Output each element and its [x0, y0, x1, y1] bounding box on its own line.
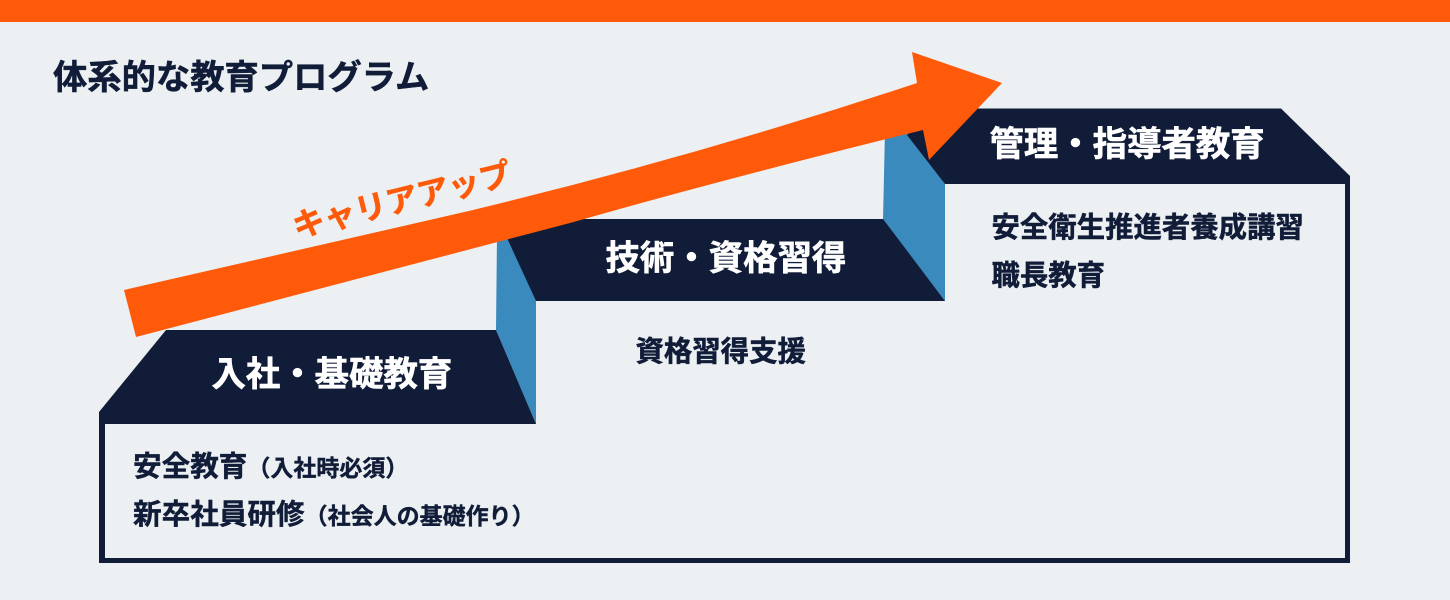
panel: step 3 management education [883, 108, 1350, 301]
text block: step 3 items: 職長教育 [992, 260, 1105, 292]
heading: step 2: 技術・資格習得 [606, 240, 846, 278]
arrow: career up [124, 52, 1002, 337]
text block: step 3 items: 安全衛生推進者養成講習 [992, 212, 1304, 244]
riser: step 3 blue face [883, 130, 945, 301]
title: 体系的な教育プログラム [53, 59, 429, 97]
header band: step 1 [99, 330, 536, 424]
text block: step 1 items [133, 451, 535, 531]
label: career up: キャリアアップ [289, 156, 515, 245]
text block: step 2 item: 資格習得支援 [636, 336, 806, 368]
header band: step 2 [507, 219, 945, 301]
header band: step 3 [907, 108, 1350, 184]
heading: step 3: 管理・指導者教育 [990, 126, 1265, 164]
riser: step 2 blue face [496, 235, 536, 424]
text block: step 3 items [992, 212, 1304, 292]
panel: step 1 onboarding [99, 330, 536, 531]
heading: step 1: 入社・基礎教育 [212, 356, 452, 394]
text block: step 1 items: 新卒社員研修（社会人の基礎作り） [133, 499, 535, 531]
panel: step 2 skills [496, 219, 945, 424]
top orange bar [0, 0, 1450, 22]
outline: staircase body [99, 176, 1350, 563]
text block: step 1 items: 安全教育（入社時必須） [133, 451, 408, 483]
